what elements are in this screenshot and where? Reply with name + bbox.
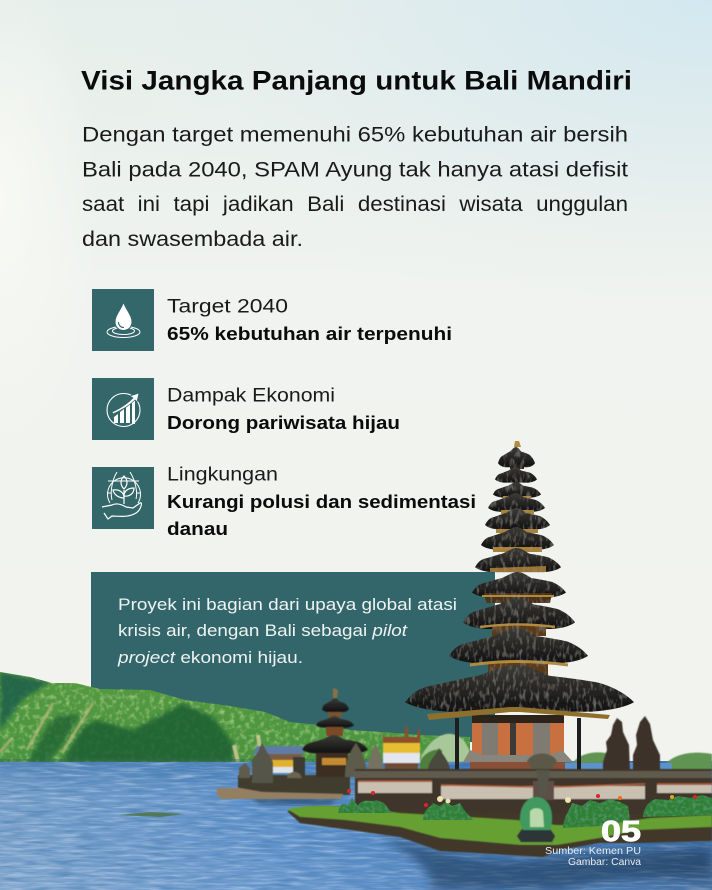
lake — [0, 761, 712, 890]
callout text — [117, 596, 457, 667]
pagoda spire — [514, 441, 521, 447]
item text: dampak ekonomi — [167, 386, 400, 433]
item text: dampak ekonomi: Dampak Ekonomi — [167, 386, 335, 406]
item text: target 2040 — [167, 296, 452, 344]
item text: lingkungan: Kurangi polusi dan sedimentasi — [167, 491, 476, 512]
callout text: Proyek ini bagian dari upaya global atasi — [118, 596, 457, 614]
icon: growth chart — [92, 378, 154, 440]
intro paragraph: Dengan target memenuhi 65% kebutuhan air bersih — [82, 122, 628, 146]
intro paragraph: Bali pada 2040, SPAM Ayung tak hanya atasi defisit — [82, 158, 628, 182]
item text: dampak ekonomi: Dorong pariwisata hijau — [167, 412, 400, 433]
pagoda roof tiers — [405, 447, 634, 712]
item text: lingkungan: Lingkungan — [167, 464, 278, 486]
callout text: krisis air, dengan Bali sebagai pilot — [118, 622, 409, 640]
icon: globe and plant in hand — [92, 467, 154, 529]
icon: water drop — [92, 289, 154, 351]
item: lingkungan — [92, 464, 476, 539]
item text: lingkungan — [167, 464, 476, 539]
temple courtyard wall — [355, 754, 712, 816]
garden island — [287, 789, 712, 857]
source credits: Sumber: Kemen PU — [545, 846, 641, 857]
item: dampak ekonomi — [92, 378, 400, 440]
forested hills — [0, 670, 480, 763]
callout text: project ekonomi hijau. — [117, 649, 303, 667]
pagoda shrine body — [455, 715, 581, 770]
pagoda gold cornice — [427, 707, 610, 720]
source credits: Gambar: Canva — [568, 857, 641, 868]
item: target 2040 — [92, 289, 452, 351]
main pagoda — [405, 441, 634, 770]
ceremonial banner pavilion — [383, 727, 420, 770]
callout panel — [91, 572, 495, 742]
item text: target 2040: 65% kebutuhan air terpenuhi — [167, 323, 452, 344]
small temple stone base and pier — [217, 743, 350, 799]
title: Visi Jangka Panjang untuk Bali Mandiri — [81, 66, 632, 96]
page number: 05 — [601, 816, 641, 848]
intro paragraph: saat ini tapi jadikan Bali destinasi wisata unggulan — [82, 192, 628, 216]
small temple pagoda — [302, 688, 383, 777]
split gate statues — [603, 716, 660, 772]
intro paragraph — [82, 122, 628, 251]
item text: lingkungan: danau — [167, 518, 228, 539]
intro paragraph: dan swasembada air. — [82, 227, 303, 251]
item text: target 2040: Target 2040 — [167, 296, 288, 318]
small temple — [217, 688, 450, 799]
leafy shrubs — [338, 795, 712, 828]
frog statue — [517, 797, 555, 842]
source credits — [545, 846, 641, 868]
garden plants and flowers — [338, 789, 712, 828]
distant shore behind main temple — [420, 734, 712, 772]
shrubs and shrine — [420, 748, 450, 772]
